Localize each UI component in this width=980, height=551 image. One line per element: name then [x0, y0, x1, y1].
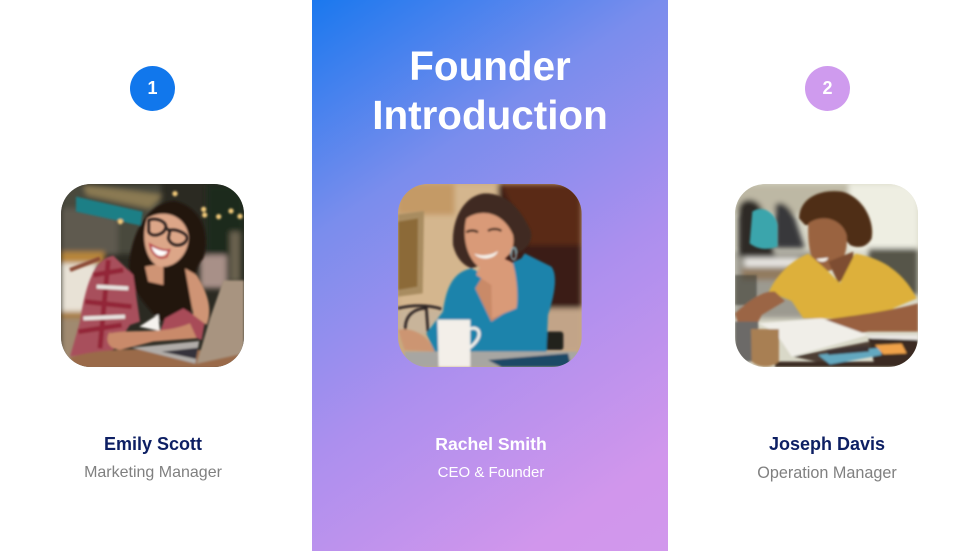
name: Rachel Smith: Rachel Smith	[435, 434, 547, 454]
photo: Emily Scott	[61, 184, 244, 367]
role: Marketing Manager: Marketing Manager	[84, 464, 222, 481]
badge: number 2	[805, 66, 850, 111]
name: Joseph Davis: Joseph Davis	[769, 434, 885, 454]
badge: number 2: 2	[822, 78, 832, 98]
photo: Joseph Davis	[735, 184, 918, 367]
title: Introduction	[372, 92, 608, 138]
role: Operation Manager: Operation Manager	[757, 464, 897, 482]
badge: number 1: 1	[147, 78, 158, 98]
role: CEO & Founder: CEO & Founder	[438, 464, 544, 481]
title: Founder	[409, 43, 571, 89]
title	[372, 43, 608, 138]
photo: Rachel Smith	[398, 184, 582, 367]
badge: number 1	[130, 66, 175, 111]
name: Emily Scott: Emily Scott	[104, 434, 202, 454]
panel: center gradient column	[312, 0, 668, 551]
